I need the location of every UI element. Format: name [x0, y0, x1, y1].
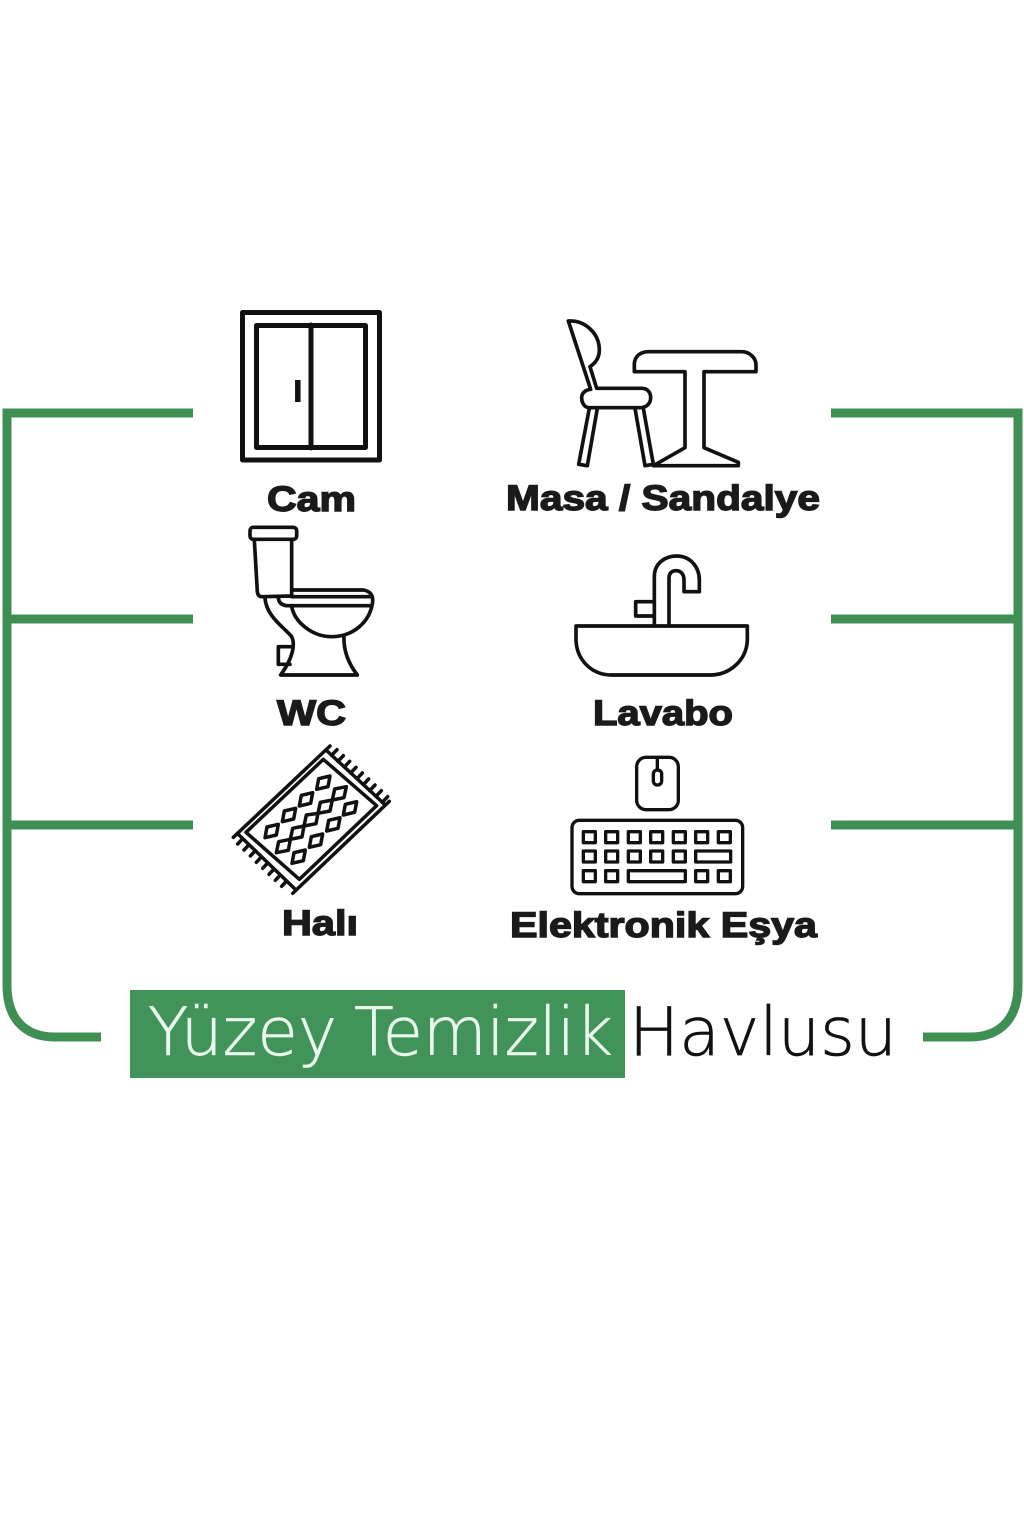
label: Masa / Sandalye: Masa / Sandalye — [506, 479, 820, 518]
icon: sink with faucet — [576, 556, 747, 675]
icon: chair and table — [568, 321, 756, 466]
title banner: Yüzey Temizlik: Temizlik — [354, 993, 613, 1071]
icon: mouse and keyboard — [572, 757, 743, 894]
mouse — [637, 757, 678, 810]
label: Lavabo: Lavabo — [593, 694, 733, 733]
icon: toilet — [250, 527, 373, 675]
label: Elektronik Eşya: Elektronik Eşya — [510, 906, 818, 945]
label: WC: WC — [277, 694, 346, 733]
keyboard — [572, 820, 743, 894]
label: Halı: Halı — [282, 904, 358, 943]
label: Cam: Cam — [267, 480, 356, 519]
icon: window — [242, 312, 380, 460]
right green bracket — [831, 413, 1018, 1037]
title banner: Yüzey Temizlik: Yüzey — [148, 993, 337, 1071]
title banner: Yüzey Temizlik — [130, 990, 625, 1078]
icon: rug — [233, 746, 389, 893]
left green bracket — [7, 413, 193, 1037]
title text: Havlusu: Havlusu — [629, 993, 897, 1071]
